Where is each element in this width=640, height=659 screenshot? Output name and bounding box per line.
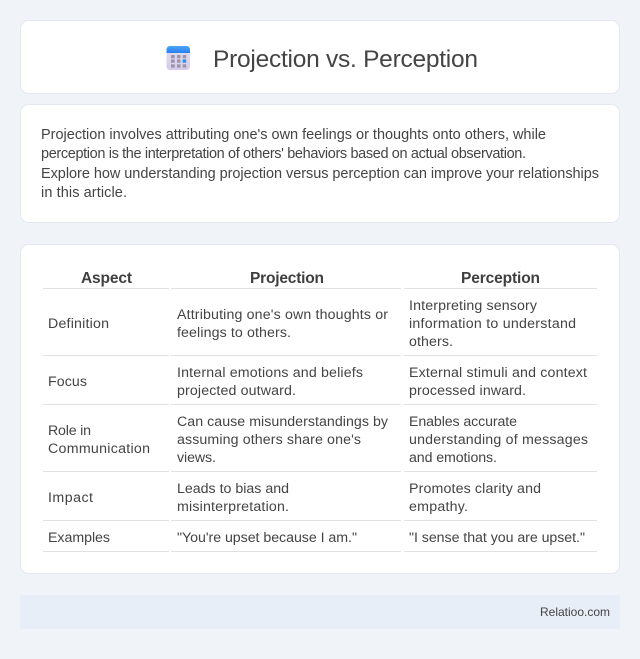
intro text: Projection involves attributing one's own feelings or thoughts onto others, while bbox=[41, 127, 546, 143]
row: focus bbox=[48, 365, 587, 399]
row: role in communication bbox=[48, 414, 588, 466]
icon: calendar bbox=[166, 46, 190, 70]
row: role in communication: understanding of messages bbox=[409, 432, 588, 448]
row: role in communication: Enables accurate bbox=[409, 414, 517, 430]
row: definition: Attributing one's own thoughts or bbox=[177, 307, 388, 323]
row: definition: Definition bbox=[48, 316, 109, 332]
row: impact: empathy. bbox=[409, 499, 468, 515]
table header row: Projection bbox=[250, 270, 324, 287]
row: impact: misinterpretation. bbox=[177, 499, 289, 515]
row: definition: others. bbox=[409, 334, 453, 350]
intro text: in this article. bbox=[41, 185, 127, 201]
table header row bbox=[81, 270, 540, 287]
row: impact: Impact bbox=[48, 490, 93, 506]
row: definition: information to understand bbox=[409, 316, 576, 332]
title: Projection vs. Perception bbox=[213, 46, 478, 73]
row: examples bbox=[48, 530, 585, 546]
row: focus: Focus bbox=[48, 374, 87, 390]
row: examples: "I sense that you are upset." bbox=[409, 530, 585, 546]
table header row: Perception bbox=[461, 270, 540, 287]
row: role in communication: and emotions. bbox=[409, 450, 497, 466]
row: impact: Promotes clarity and bbox=[409, 481, 541, 497]
row: role in communication: Can cause misunderstandings by bbox=[177, 414, 389, 430]
row: definition bbox=[48, 298, 576, 350]
row: focus: processed inward. bbox=[409, 383, 526, 399]
row: role in communication: assuming others share one's bbox=[177, 432, 361, 448]
row: focus: Internal emotions and beliefs bbox=[177, 365, 363, 381]
row: examples: "You're upset because I am." bbox=[177, 530, 357, 546]
row: definition: feelings to others. bbox=[177, 325, 291, 341]
panel: introduction bbox=[20, 104, 620, 222]
panel: comparison table bbox=[20, 244, 620, 574]
intro text: perception is the interpretation of others' behaviors based on actual observation. bbox=[41, 146, 526, 162]
footer bbox=[20, 595, 620, 629]
row: impact: Leads to bias and bbox=[177, 481, 289, 497]
row: examples: Examples bbox=[48, 530, 110, 546]
row: role in communication: Communication bbox=[48, 441, 150, 457]
table header row: Aspect bbox=[81, 270, 132, 287]
row: definition: Interpreting sensory bbox=[409, 298, 538, 314]
header panel bbox=[20, 20, 620, 94]
row: role in communication: Role in bbox=[48, 423, 91, 439]
row: focus: External stimuli and context bbox=[409, 365, 587, 381]
row: impact bbox=[48, 481, 541, 515]
intro text bbox=[41, 127, 599, 201]
row: role in communication: views. bbox=[177, 450, 216, 466]
intro text: Explore how understanding projection versus perception can improve your relationships bbox=[41, 166, 599, 182]
footer credit: Relatioo.com bbox=[540, 605, 610, 619]
row: focus: projected outward. bbox=[177, 383, 296, 399]
